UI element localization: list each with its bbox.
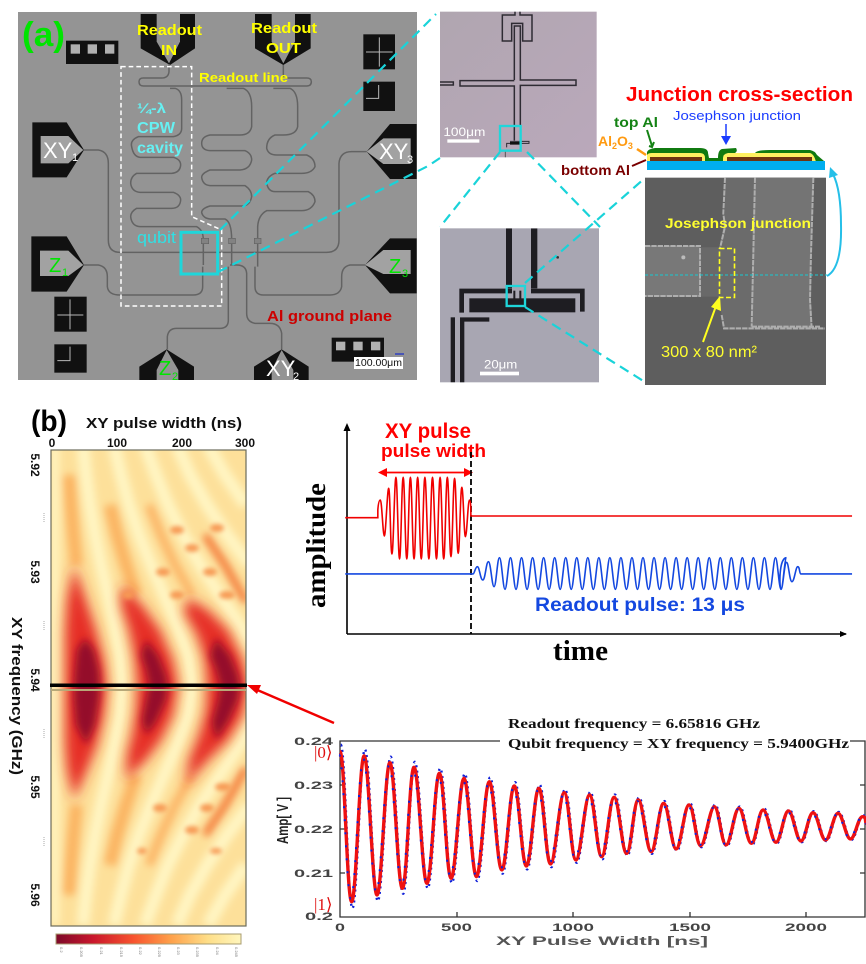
x axis title: XY Pulse Width [ns] [496,934,708,948]
micrograph background [440,12,597,157]
blue readout waveform [345,558,852,589]
y tick labels: 0.22 [294,824,333,836]
x tick labels: 1500 [669,922,711,934]
pad label Z2: Z [159,358,171,380]
chevron dark cores [74,638,240,745]
heat map y tick labels: 5.94 [28,668,42,692]
frequency annotation: Readout frequency = 6.65816 GHz [508,716,760,731]
heat map colour bar: 0.245 [234,947,239,958]
heat map x tick labels: 0 [49,436,56,450]
heat map colour bar: 0.205 [79,947,84,958]
heat map y tick labels: 5.95 [28,775,42,799]
interference spots [122,524,235,854]
heat map x tick labels [49,436,255,450]
cavity label: ¼-λ [137,100,166,116]
pad label Z1: 1 [62,267,68,279]
y tick labels: 0.21 [294,868,333,880]
heat map colour bar: 0.225 [157,947,162,958]
pad label XY1: 1 [72,152,78,164]
x tick labels: 2000 [785,922,827,934]
20 micron scale bar [480,357,519,375]
qubit cross structure [440,12,576,157]
pad label XY1: XY [43,138,73,163]
readout out label [251,20,317,57]
pad label Z3: Z [389,256,401,278]
Al2O3 label: 2 [612,141,617,151]
heat map x tick labels: 100 [107,436,127,450]
dashed timing line [470,452,472,634]
time and amplitude axes [347,427,846,634]
panel b label: (b) [31,405,67,438]
junction size label: 300 x 80 nm² [661,344,758,361]
frequency annotation [508,716,849,751]
y tick labels: 0.24 [294,736,335,748]
pad label Z2: 2 [172,371,178,383]
heat map y tick labels: 5.96 [28,883,42,907]
pulse width arrow [378,468,473,477]
frequency annotation: Qubit frequency = XY frequency = 5.9400GHz [508,736,849,751]
panel a: chip layout micrograph [18,12,417,383]
panel: junction zoom micrograph [440,228,599,382]
heat map frame [51,450,246,926]
chip scale bar: 100.00μm [355,358,402,369]
time label: time [553,636,608,667]
highlight square [507,286,525,306]
blue arrow [721,124,731,145]
20 micron scale bar: 20μm [484,357,517,371]
measured points over fit [339,755,866,899]
panel: Rabi oscillation trace [275,716,866,948]
chevron red lobes [65,565,248,800]
heat map x tick labels: 200 [172,436,192,450]
yellow arrow [703,296,721,342]
fitted curve [340,752,866,902]
chevron field [51,445,262,926]
pad label Z1: Z [49,255,61,277]
data and fit curves [339,745,866,908]
heat map colour bar: 0.24 [215,947,220,956]
minor ticks [43,513,45,846]
100 micron scale bar: 100μm [443,125,485,139]
panel: pulse sequence diagram [301,420,852,667]
qubit highlight square [181,232,218,274]
cavity label: CPW [137,120,176,137]
qubit label: qubit [137,228,176,247]
heat map colour bar [56,934,241,958]
bottom Al label: bottom Al [561,162,630,178]
x tick labels [335,922,827,934]
Josephson junction blue label: Josephson junction [673,108,801,123]
pad label XY3: 3 [407,154,413,166]
pad centres [40,136,411,276]
pulse width label: pulse width [381,441,486,461]
pad label Z3: 3 [402,268,408,280]
100 micron scale bar [443,125,485,143]
heat map colour bar: 0.23 [176,947,181,956]
Al2O3 arrow [637,149,646,155]
x tick labels: 1000 [552,922,594,934]
curved link arrow [827,167,841,276]
cavity label: cavity [137,140,183,157]
transmission lines and cavities [83,64,367,349]
ground plane label: Al ground plane [267,308,392,325]
highlight square [500,126,521,151]
dashed cavity outline [121,67,222,306]
x tick labels: 0 [335,922,345,934]
measured points under fit [341,745,866,908]
y tick labels: 0.23 [294,780,333,792]
heat map y tick labels [28,453,42,907]
pad label Z1 [49,255,68,279]
x tick labels: 500 [441,922,472,934]
amplitude label: amplitude [301,483,331,608]
y axis arrow head [344,423,350,431]
Al2O3 label: 3 [628,141,633,151]
layer stack [647,148,825,170]
cross-section title: Junction cross-section [626,84,853,106]
heat map x tick labels: 300 [235,436,255,450]
heat map y axis title: XY frequency (GHz) [8,617,25,775]
heat map colour bar: 0.215 [119,947,124,958]
readout line label: Readout line [199,70,288,85]
SEM drawing [645,178,826,385]
dotted cross-section line [645,274,827,276]
chip scale bar [354,354,404,369]
contact pads [31,14,417,380]
plot frame [340,741,865,917]
pad label Z2 [159,358,178,383]
state label 1: |1⟩ [314,895,333,914]
heat map colour bar: 0.2 [59,947,64,953]
pad label Z3 [389,256,408,280]
pad label XY2: XY [266,356,296,381]
junction dashed rectangle [720,248,734,298]
chip background [18,12,417,380]
pad label XY3: XY [379,139,409,164]
red pointer arrow [247,685,334,723]
heat map colour bar: 0.22 [138,947,143,956]
readout out label: Readout [251,20,317,37]
dashed zoom lines [218,14,645,382]
selected frequency line [50,684,247,691]
readout in label [137,22,202,59]
label (a): (a) [22,16,65,54]
y tick labels: 0.2 [305,911,333,923]
XY pulse label: XY pulse [385,420,471,443]
readout out label: OUT [266,40,301,57]
panel: junction cross-section diagram [561,84,853,276]
red XY waveform [345,477,852,559]
bottom Al arrow [632,160,646,166]
readout in label: Readout [137,22,202,39]
state label 0: |0⟩ [314,743,333,762]
chip layout drawing [31,14,417,380]
heat map: Rabi chevron [44,445,262,926]
electrode structures [451,228,585,382]
y tick labels [294,736,335,923]
panel: optical micrograph of qubit [440,12,597,157]
Al2O3 label: O [617,133,628,149]
Josephson junction label: Josephson junction [665,215,811,231]
heat map colour bar: 0.235 [195,947,200,958]
alignment marks [54,34,395,373]
readout in label: IN [161,42,177,59]
panel: SEM image of Josephson junction [645,178,827,385]
cavity label [137,100,183,157]
readout pulse label: Readout pulse: 13 μs [535,595,745,616]
micrograph background [440,228,599,382]
heat map colour bar: 0.21 [99,947,104,956]
pad label XY2: 2 [293,371,299,383]
junction marks [201,238,261,244]
Al2O3 label: Al [598,133,612,149]
top Al arrow [647,130,654,147]
y axis title: Amp[ V ] [275,797,292,844]
heat map y tick labels: 5.92 [28,453,42,477]
heat map x axis title: XY pulse width (ns) [86,415,242,432]
top Al label: top Al [614,114,658,130]
heat map y tick labels: 5.93 [28,560,42,584]
